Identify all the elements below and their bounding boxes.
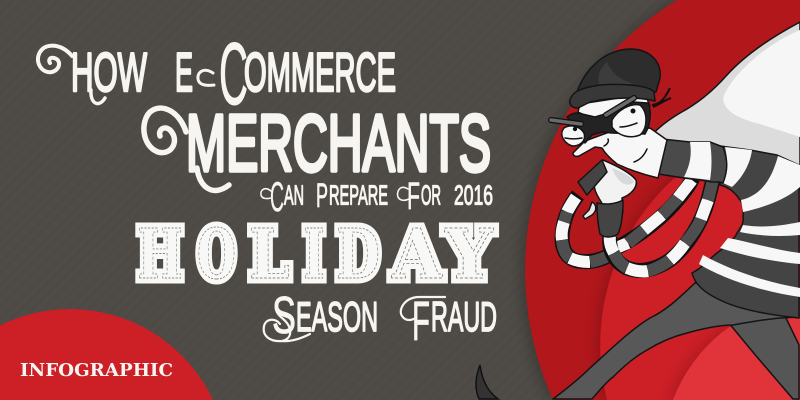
title line: Holiday: I	[303, 215, 325, 295]
icon: eyes	[562, 105, 646, 146]
body: shoulder sleeve	[652, 139, 727, 183]
title line: Holiday: Y	[444, 215, 494, 295]
title line: Can Prepare For 2016: F	[407, 176, 420, 218]
title line: Can Prepare For 2016: AN	[284, 180, 304, 210]
icon: eyebrows	[551, 98, 634, 124]
title line: Season Fraud: RAUD	[431, 293, 497, 340]
title line: Holiday: O	[197, 215, 236, 295]
title line: Holiday	[137, 215, 494, 295]
arm: forearm	[616, 178, 693, 248]
arm: long coil	[610, 176, 714, 271]
title line: Can Prepare For 2016: 2016	[454, 180, 493, 210]
panel: red background circles	[520, 0, 800, 400]
title line: Can Prepare For 2016: OR	[421, 180, 441, 210]
title line: Can Prepare For 2016: REPARE	[329, 180, 388, 210]
title line: How eCommerce: HOW	[71, 41, 147, 103]
title line: Season Fraud: F	[412, 289, 430, 352]
title line: Holiday: D	[336, 215, 380, 295]
icon: beanie hat	[570, 49, 671, 120]
body: second leg	[728, 316, 799, 399]
title line: Holiday: I	[303, 215, 325, 295]
icon: left cuff and hand	[578, 160, 636, 237]
title	[38, 24, 497, 352]
title line: Holiday: D	[336, 215, 380, 295]
title line: How eCommerce	[38, 24, 396, 123]
arm: left coil	[562, 195, 608, 262]
icon: head and neck	[573, 128, 667, 178]
title line: How eCommerce: OMMERCE	[244, 41, 396, 103]
title line: Can Prepare For 2016	[261, 173, 493, 220]
body: front leg	[553, 283, 799, 399]
title line: Merchants	[144, 98, 491, 190]
title line: Holiday: O	[197, 215, 236, 295]
title line: Merchants: MERCHANTS	[186, 98, 491, 188]
title line: Holiday: L	[249, 215, 290, 295]
badge label: INFOGRAPHIC	[20, 360, 173, 381]
icon: bandit mask	[567, 102, 650, 143]
panel: infographic badge	[0, 309, 213, 400]
title line: Holiday: L	[249, 215, 290, 295]
body: striped jumper	[692, 146, 800, 318]
title line: Season Fraud: S	[272, 287, 296, 345]
title line: How eCommerce: C	[219, 24, 248, 123]
title line: Holiday: Y	[444, 215, 494, 295]
icon: rear foot tip	[476, 365, 498, 399]
title line: Holiday: H	[137, 215, 183, 295]
title line: Can Prepare For 2016: C	[270, 173, 284, 220]
title line: Season Fraud: EASON	[296, 293, 378, 340]
illustration: masked burglar	[476, 22, 800, 399]
title line: How eCommerce: E	[175, 41, 193, 103]
jumper stripes	[699, 147, 800, 297]
title line: Holiday: H	[137, 215, 183, 295]
icon: loot sack	[648, 22, 800, 190]
title line: Season Fraud	[264, 287, 497, 352]
title line: Can Prepare For 2016: P	[316, 177, 328, 215]
title line: Holiday: A	[391, 215, 443, 295]
title line: Holiday: A	[391, 215, 443, 295]
